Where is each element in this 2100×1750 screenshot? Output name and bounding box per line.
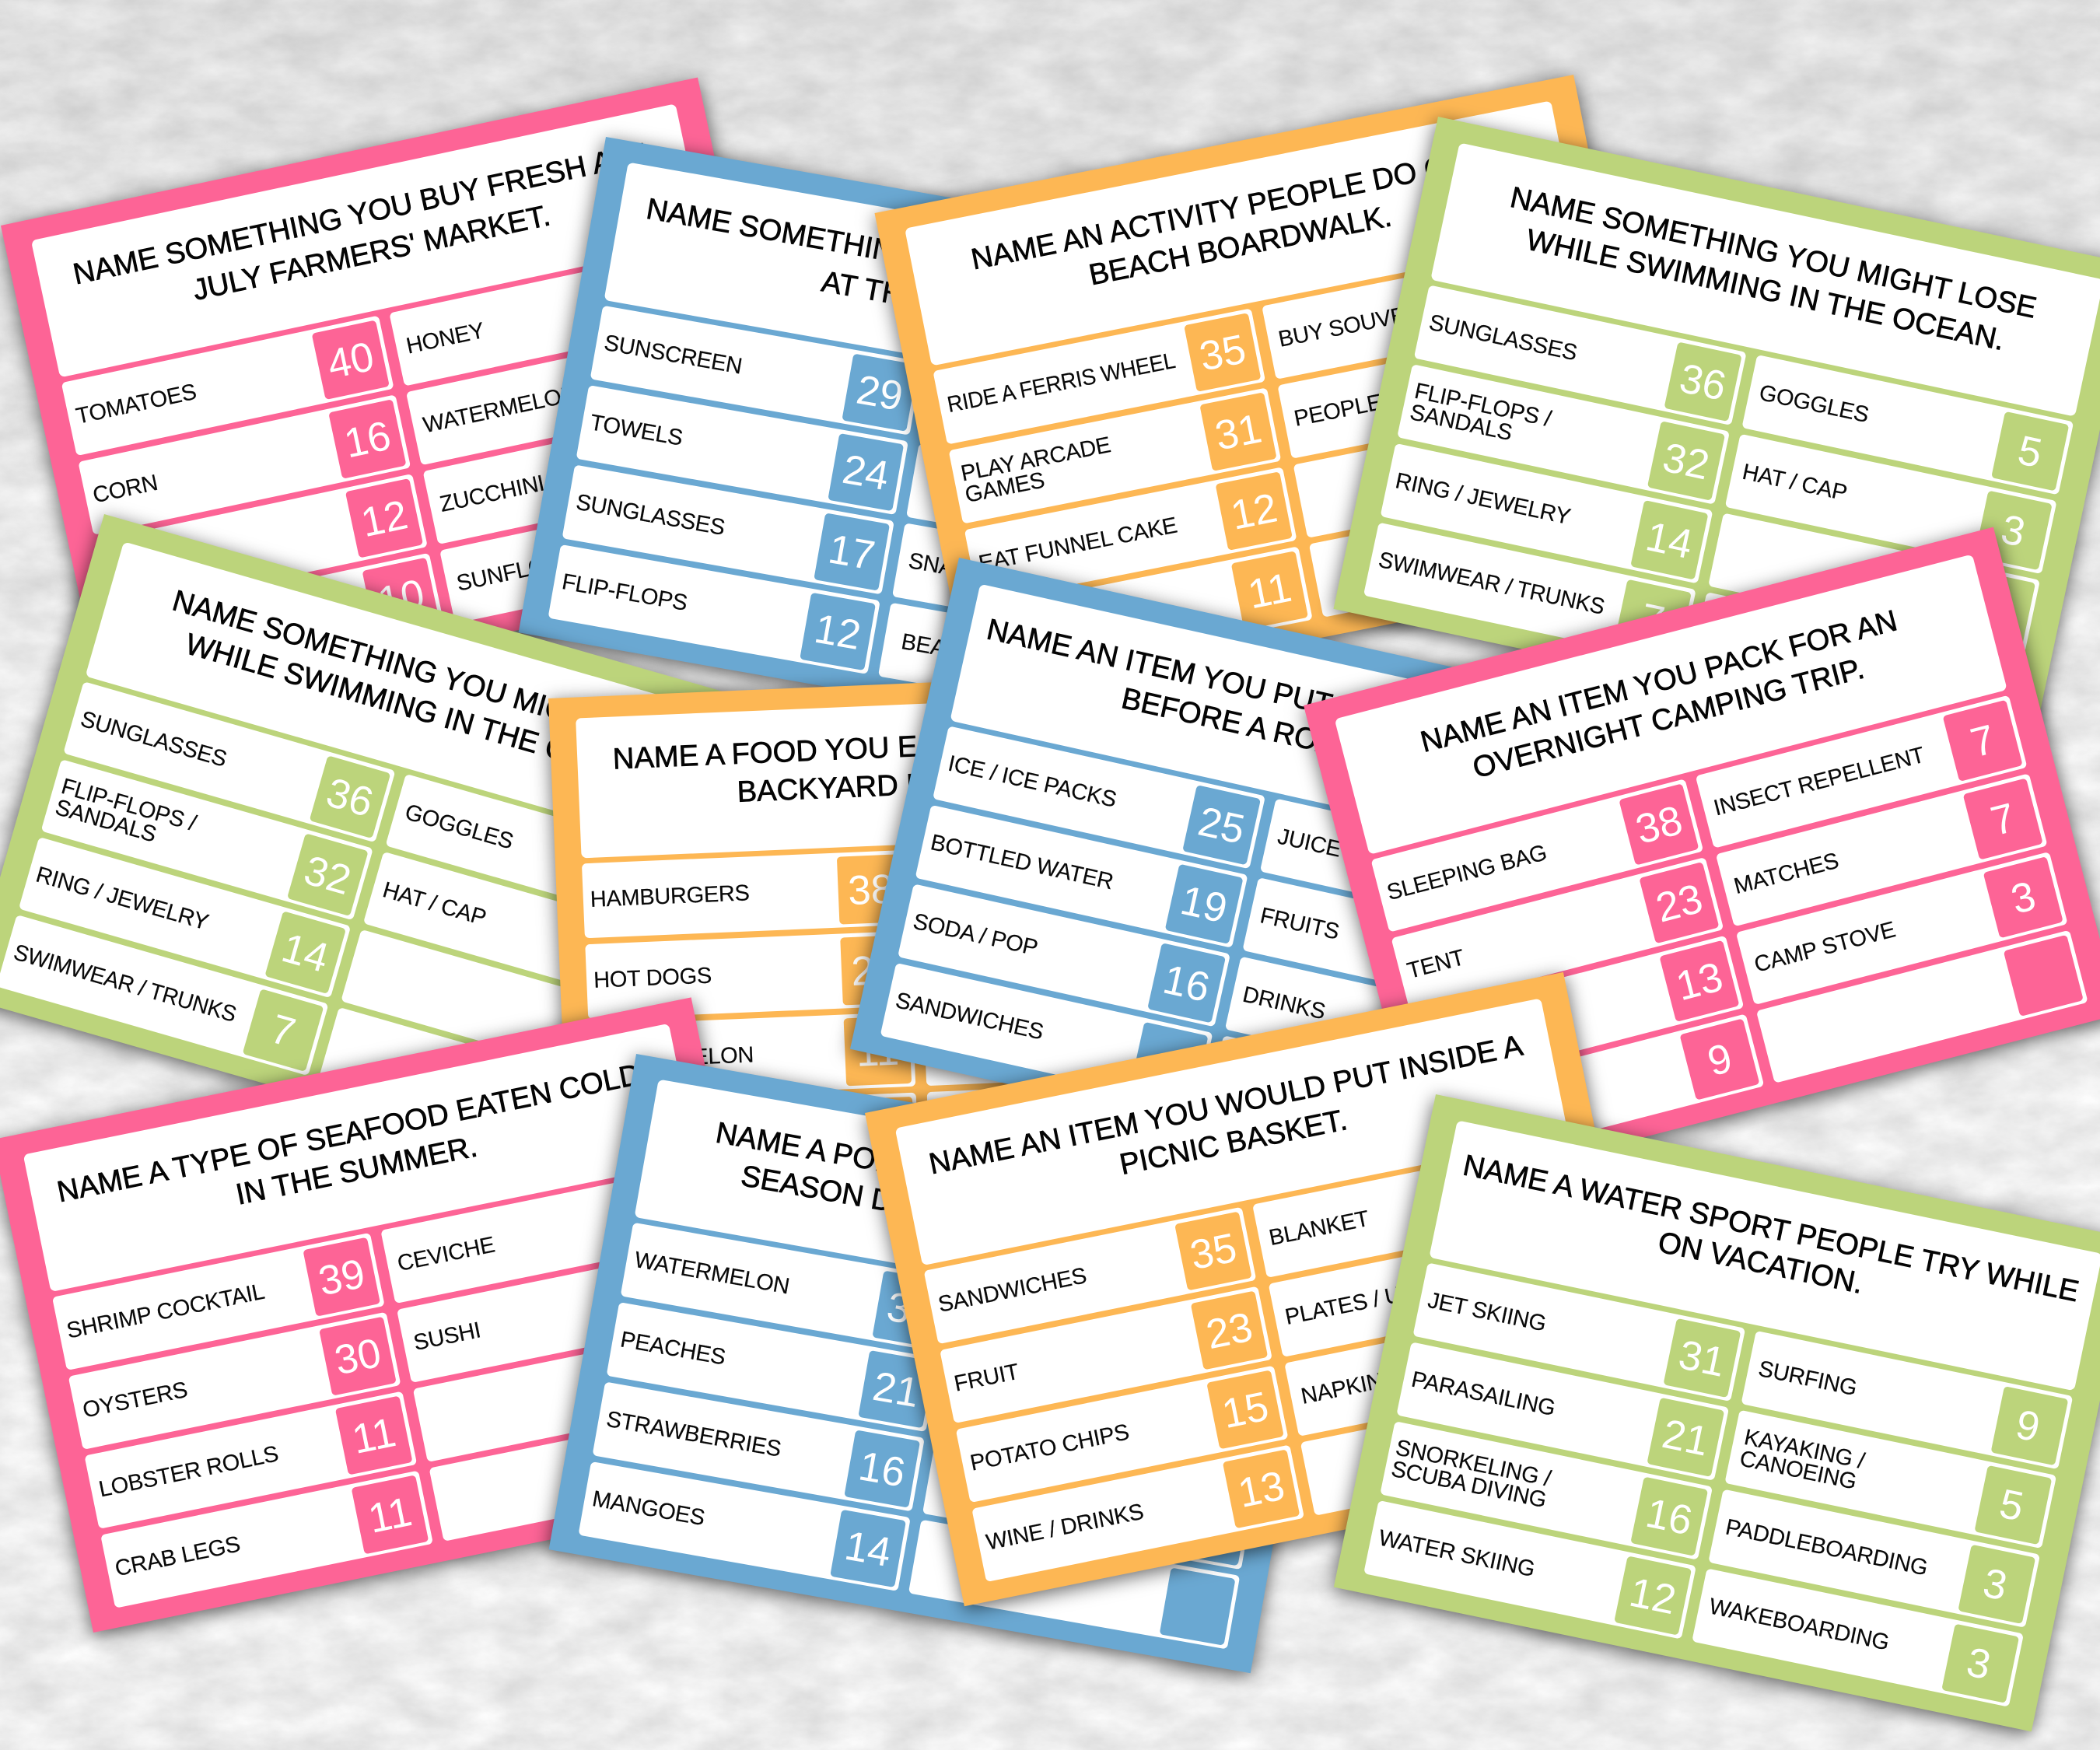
row: hamburgers	[582, 850, 909, 938]
row: watermelon	[406, 325, 738, 465]
panel: green card, water sports	[1334, 1094, 2100, 1731]
row: juice: JUICE	[1276, 824, 1343, 863]
row: parasailing	[1396, 1342, 1729, 1481]
row: 9	[1432, 1013, 1764, 1167]
row: drinks	[1225, 957, 1557, 1099]
row: matches: 7	[1986, 795, 2020, 845]
row: tent	[1391, 857, 1724, 1010]
row: hat: HAT / CAP	[1740, 460, 1849, 506]
row: shrimp cocktail	[52, 1233, 385, 1370]
row: sleeping bag: SLEEPING BAG	[1384, 840, 1549, 905]
row: snorkeling: 16	[1642, 1490, 1696, 1544]
heading: WHILE SWIMMING IN THE OCEAN.	[1524, 223, 2007, 357]
row: sushi: SUSHI	[411, 1318, 483, 1356]
row: sandwiches	[924, 1207, 1256, 1344]
row: hat	[1725, 434, 2057, 574]
heading: PICNIC BASKET.	[1117, 1103, 1350, 1181]
row: arcade games	[949, 387, 1281, 524]
row: 11	[980, 546, 1313, 683]
row: flip-flops: FLIP-FLOPS /	[58, 774, 200, 836]
heading: SEASON DURING SUMMER.	[738, 1159, 1136, 1261]
row: souvenirs	[1262, 243, 1594, 380]
row: watermelon	[589, 1012, 915, 1100]
row: bottled water: 19	[1177, 877, 1231, 932]
row: bottled water	[915, 805, 1248, 948]
heading: WHILE SWIMMING IN THE OCEAN.	[182, 627, 660, 794]
row: souvenirs: BUY SOUVENIRS	[1276, 292, 1460, 352]
row: arcade games: PLAY ARCADE	[959, 432, 1113, 486]
row: jewelry: 14	[277, 925, 334, 982]
row: ceviche: CEVICHE	[395, 1232, 497, 1276]
row: potato chips: 15	[1218, 1384, 1272, 1437]
panel: orange card, picnic	[865, 972, 1663, 1606]
row: wakeboarding	[1692, 1568, 2024, 1707]
row: parasailing: PARASAILING	[1409, 1367, 1557, 1421]
row: right 2	[920, 917, 1247, 1005]
row: right 4	[429, 1404, 761, 1542]
heading: BEFORE A ROAD TRIP.	[1118, 681, 1439, 783]
row: jewelry	[1381, 443, 1713, 583]
row: right 4	[319, 1007, 650, 1168]
row: kayaking: 5	[1996, 1481, 2028, 1530]
row: right 3	[341, 929, 673, 1090]
heading	[604, 162, 1277, 415]
heading: BEACH BOARDWALK.	[1086, 199, 1395, 292]
row: beach ball: BEACH BALL	[899, 629, 1038, 677]
row: swimwear: SWIMWEAR / TRUNKS	[1377, 548, 1607, 620]
heading: NAME AN ACTIVITY PEOPLE DO ON A	[968, 140, 1498, 277]
row: shrimp cocktail: 39	[315, 1251, 369, 1304]
panel: green card, ocean (top right)	[1333, 117, 2100, 757]
row: insect repellent: INSECT REPELLENT	[1711, 743, 1927, 821]
row: watermelon: WATERMELON	[597, 1042, 754, 1074]
row: honey	[389, 246, 721, 387]
row: sushi	[397, 1245, 729, 1383]
panel: blue card, summer fruit	[549, 1054, 1338, 1673]
row: parasailing: 21	[1658, 1411, 1713, 1465]
row: ice: 25	[1194, 799, 1249, 853]
row: mangoes	[578, 1461, 911, 1591]
row: right 4	[1207, 1035, 1539, 1178]
row: peaches	[607, 1302, 939, 1432]
row: sunglasses: SUNGLASSES	[574, 490, 726, 541]
row: right 3	[922, 1440, 1254, 1570]
panel: orange card, backyard food	[548, 669, 1281, 1201]
row: blanket	[1252, 1141, 1584, 1278]
heading: JULY FARMERS' MARKET.	[190, 198, 553, 307]
row: matches: MATCHES	[1731, 849, 1841, 899]
row: watermelon: 11	[856, 1028, 900, 1076]
row: crab legs: 11	[365, 1489, 415, 1542]
row: swimwear: 7	[1636, 595, 1668, 645]
row: ferris wheel: 35	[1195, 326, 1250, 380]
row: people watch: PEOPLE WATCH	[1292, 373, 1468, 432]
row: mangoes: 14	[842, 1523, 894, 1576]
row: sunglasses: 36	[321, 769, 378, 826]
row: flip-flops: 12	[811, 606, 864, 659]
row: goggles	[1741, 355, 2074, 495]
row: plates: PLATES / UTENSILS	[1283, 1264, 1494, 1330]
row: watermelon: WATERMELON	[421, 381, 579, 438]
row: potato chips: POTATO CHIPS	[968, 1419, 1131, 1476]
row: hat	[363, 852, 695, 1013]
row: towels	[576, 385, 908, 515]
row: fruit	[940, 1286, 1272, 1423]
row: zucchini	[423, 404, 754, 544]
row: funnel cake: EAT FUNNEL CAKE	[977, 513, 1179, 576]
heading	[1430, 142, 2100, 417]
row: jewelry: 14	[1642, 513, 1696, 568]
panel: pink card, camping	[1304, 527, 2100, 1192]
row: sandwiches: SANDWICHES	[893, 988, 1045, 1045]
row: tent: TENT	[1405, 945, 1468, 984]
row: paddleboarding: PADDLEBOARDING	[1724, 1515, 1930, 1580]
row: hot dogs: HOT DOGS	[593, 964, 712, 993]
row: sunscreen: SUNSCREEN	[602, 331, 744, 380]
row: ferris wheel	[933, 308, 1265, 444]
row: peaches: PEACHES	[618, 1327, 727, 1370]
row: snacks: SNACKS	[907, 548, 1001, 589]
row: sunglasses: 17	[825, 526, 878, 579]
row: camp stove: 3	[2007, 873, 2040, 923]
row: water skiing: 12	[1626, 1570, 1680, 1623]
row: surfing: SURFING	[1756, 1356, 1859, 1401]
row: tomatoes	[61, 316, 394, 456]
row: peaches: 21	[870, 1363, 922, 1416]
row: sunflowers	[439, 483, 772, 624]
row: right 4	[1692, 592, 2023, 733]
row: strawberries: 16	[856, 1443, 908, 1496]
row: 11: 11	[1244, 565, 1295, 618]
row: snorkeling: SCUBA DIVING	[1389, 1457, 1549, 1513]
heading	[905, 100, 1578, 366]
row: sunglasses: 36	[1675, 355, 1730, 410]
heading: NAME AN ITEM YOU PUT IN A COOLER	[984, 613, 1527, 764]
heading: NAME A POPULAR FRUIT IN	[713, 1116, 1107, 1217]
heading	[31, 103, 705, 377]
row: left 4	[592, 1093, 919, 1181]
row: sunscreen	[590, 306, 922, 436]
row: napkins	[1284, 1300, 1616, 1437]
row: hamburgers: 38	[847, 866, 894, 914]
heading	[1335, 555, 2007, 855]
row: sleeping bag: 38	[1631, 797, 1687, 853]
row: wakeboarding: 3	[1963, 1639, 1994, 1689]
row: wine: WINE / DRINKS	[984, 1500, 1146, 1556]
row: kayaking: CANOEING	[1738, 1446, 1859, 1495]
row: sandwiches: SANDWICHES	[936, 1263, 1089, 1318]
heading: NAME SOMETHING YOU BUY FRESH AT A	[70, 135, 656, 291]
row: flip-flops	[548, 544, 880, 674]
row: paddleboarding: 3	[1979, 1560, 2011, 1609]
row: sunglasses	[63, 681, 396, 842]
row: soda	[898, 884, 1230, 1027]
row: camp stove: CAMP STOVE	[1752, 917, 1898, 978]
row: 10: 10	[374, 571, 429, 625]
row: right 4	[927, 1079, 1253, 1167]
row: oysters: OYSTERS	[81, 1377, 190, 1423]
row: people watch	[1277, 323, 1609, 459]
row: napkins: NAPKINS	[1299, 1366, 1399, 1409]
row: crab legs	[100, 1471, 433, 1608]
row: snorkeling: SNORKELING /	[1394, 1435, 1554, 1492]
row: hot dogs	[585, 931, 912, 1019]
row: goggles: GOGGLES	[402, 800, 516, 854]
row: jet skiing: JET SKIING	[1426, 1288, 1549, 1336]
row: mangoes: MANGOES	[590, 1486, 707, 1531]
heading: NAME SOMETHING YOU MIGHT LOSE	[1507, 180, 2039, 325]
row: matches	[1716, 773, 2048, 926]
row: towels: TOWELS	[588, 410, 684, 451]
panel: orange card, boardwalk	[874, 75, 1671, 707]
row: sandwiches	[880, 963, 1213, 1106]
heading	[576, 691, 1240, 858]
row: surfing	[1741, 1331, 2073, 1469]
row: tomatoes: 40	[324, 334, 378, 388]
row: swimwear: SWIMWEAR / TRUNKS	[11, 940, 239, 1027]
row: jet skiing	[1412, 1262, 1745, 1402]
row: 13: 13	[1671, 954, 1727, 1010]
row: bottled water: BOTTLED WATER	[928, 830, 1115, 894]
row: water skiing: WATER SKIING	[1377, 1525, 1537, 1582]
row: fruits	[1242, 877, 1574, 1020]
row: lobster rolls: LOBSTER ROLLS	[96, 1441, 281, 1502]
row: plates	[1269, 1220, 1600, 1357]
heading: NAME A TYPE OF SEAFOOD EATEN COLD	[54, 1058, 644, 1209]
heading: OVERNIGHT CAMPING TRIP.	[1469, 652, 1867, 785]
row: potato chips	[956, 1366, 1288, 1503]
row: lobster rolls: 11	[348, 1409, 400, 1463]
row: kayaking: KAYAKING /	[1742, 1425, 1867, 1474]
row: sleeping bag	[1370, 779, 1703, 933]
row: sunglasses	[1414, 285, 1747, 425]
row: corn: CORN	[91, 471, 160, 509]
heading	[635, 1079, 1307, 1332]
heading: NAME SOMETHING YOU BRING	[644, 192, 1091, 303]
panel: blue card, beach	[519, 137, 1307, 756]
row: oysters	[68, 1312, 401, 1450]
row: 9: 9	[1703, 1035, 1737, 1085]
row: wine: 13	[1234, 1463, 1289, 1517]
row: insect repellent	[1696, 695, 2028, 849]
row: strawberries	[593, 1381, 925, 1511]
row: wakeboarding: WAKEBOARDING	[1707, 1594, 1892, 1655]
row: funnel cake	[964, 467, 1297, 604]
row: ferris wheel: RIDE A FERRIS WHEEL	[945, 348, 1178, 418]
row: jewelry: RING / JEWELRY	[1393, 468, 1573, 530]
row: sunflowers: SUNFLOWERS	[454, 540, 613, 597]
row: right 3	[923, 998, 1250, 1086]
row: wine	[971, 1444, 1304, 1582]
row: watermelon	[621, 1223, 953, 1353]
row: lobster rolls	[84, 1391, 417, 1529]
row: swimwear: 7	[265, 1006, 300, 1056]
row: soda: 16	[1159, 957, 1214, 1011]
row: oysters: 30	[331, 1330, 385, 1384]
row: jewelry: RING / JEWELRY	[33, 863, 211, 935]
row: goggles: GOGGLES	[1757, 380, 1871, 428]
panel: blue card, road trip	[850, 558, 1654, 1203]
row: sunglasses: SUNGLASSES	[78, 707, 229, 772]
row: corn	[78, 394, 411, 535]
row: drinks: DRINKS	[1241, 982, 1328, 1024]
row: ceviche	[380, 1166, 712, 1304]
row: hamburgers: HAMBURGERS	[590, 880, 750, 912]
heading: AT THE BEACH.	[819, 264, 1043, 336]
row: surfing: 9	[2012, 1402, 2044, 1451]
row: 12	[95, 474, 428, 614]
row: soda: SODA / POP	[911, 909, 1040, 961]
row: watermelon: WATERMELON	[632, 1248, 791, 1299]
row: swimwear	[0, 915, 329, 1076]
row: jewelry	[19, 837, 351, 998]
row: sunglasses	[562, 464, 894, 594]
row: honey: HONEY	[404, 318, 487, 359]
row: flip-flops: SANDALS	[52, 795, 159, 848]
row: hot dogs: 24	[850, 947, 898, 995]
row: zucchini: ZUCCHINI	[438, 471, 547, 517]
heading	[1429, 1120, 2100, 1391]
row: ice	[933, 726, 1265, 869]
row: funnel cake: 12	[1227, 485, 1281, 539]
heading	[23, 1024, 697, 1292]
panel: pink card, farmers' market	[1, 78, 803, 718]
heading: NAME SOMETHING YOU MIGHT LOSE	[169, 584, 694, 764]
row: arcade games: 31	[1212, 405, 1265, 460]
row: towels: 24	[839, 446, 892, 499]
row: flip-flops: FLIP-FLOPS /	[1412, 379, 1554, 432]
row: camp stove	[1736, 852, 2068, 1005]
row: flip-flops: FLIP-FLOPS	[560, 569, 689, 616]
row: flip-flops	[1397, 364, 1730, 505]
row: flip-flops: SANDALS	[1408, 400, 1514, 446]
row: fruit: FRUIT	[952, 1360, 1021, 1397]
panel: pink card, seafood	[0, 997, 792, 1633]
heading: NAME AN ITEM YOU PACK FOR AN	[1417, 604, 1901, 759]
row: kayaking	[1724, 1410, 2056, 1549]
row: right 3	[1293, 402, 1625, 538]
row: blanket: BLANKET	[1267, 1206, 1371, 1251]
row: corn: 16	[341, 412, 395, 467]
row: hat: HAT / CAP	[380, 877, 488, 931]
heading: NAME A FOOD YOU EAT AT A	[612, 726, 1022, 776]
row: sandwiches: 35	[1186, 1225, 1241, 1279]
row: strawberries: STRAWBERRIES	[604, 1407, 783, 1462]
row: flip-flops: 32	[1659, 434, 1713, 488]
row: right 1	[950, 1280, 1282, 1410]
row: right 1	[920, 363, 1251, 493]
heading: BACKYARD BBQ.	[737, 765, 978, 809]
row: 12: 12	[357, 492, 411, 546]
heading	[950, 584, 1623, 863]
row: water skiing	[1363, 1500, 1696, 1640]
row: right 4	[908, 1520, 1240, 1650]
row: beach ball	[878, 603, 1209, 733]
row: tomatoes: TOMATOES	[74, 380, 198, 429]
row: ice: ICE / ICE PACKS	[946, 751, 1118, 813]
heading	[895, 998, 1569, 1265]
row: 10	[112, 553, 444, 693]
heading: IN THE SUMMER.	[233, 1130, 480, 1212]
row: swimwear	[1363, 523, 1696, 663]
heading: ON VACATION.	[1655, 1225, 1866, 1300]
row: 13	[1412, 936, 1744, 1089]
row: crab legs: CRAB LEGS	[113, 1531, 243, 1581]
row: shrimp cocktail: SHRIMP COCKTAIL	[65, 1279, 267, 1344]
row: fruit: 23	[1202, 1304, 1256, 1358]
row: right 2	[936, 1360, 1268, 1490]
row: sunglasses: SUNGLASSES	[1426, 310, 1580, 366]
row: goggles	[386, 774, 717, 935]
row: tent: 23	[1651, 876, 1707, 932]
row: insect repellent: 7	[1966, 716, 2000, 767]
row: right 3	[413, 1325, 745, 1462]
row: snorkeling	[1380, 1421, 1713, 1560]
row: goggles: 5	[2014, 427, 2046, 477]
row: snacks	[892, 523, 1223, 653]
row: watermelon: 30	[884, 1283, 936, 1337]
row: flip-flops: 32	[299, 847, 356, 904]
row: hat: 3	[1997, 506, 2029, 556]
panel: green card, ocean (left)	[0, 514, 789, 1194]
heading: NAME AN ITEM YOU WOULD PUT INSIDE A	[926, 1029, 1526, 1181]
row: juice	[1260, 799, 1592, 941]
row: right 2	[906, 443, 1237, 573]
row: fruits: FRUITS	[1258, 903, 1342, 945]
heading	[86, 541, 757, 858]
row: right 4	[1309, 481, 1641, 618]
row: arcade games: GAMES	[963, 467, 1047, 508]
row: jet skiing: 31	[1675, 1332, 1729, 1386]
heading: NAME A WATER SPORT PEOPLE TRY WHILE	[1460, 1149, 2082, 1308]
row: right 3	[1708, 513, 2040, 653]
row: right 1	[917, 836, 1243, 924]
row: flip-flops	[41, 759, 373, 920]
row: right 4	[1300, 1378, 1633, 1516]
row: sunscreen: 29	[853, 366, 906, 420]
row: right 4 empty	[1756, 930, 2088, 1083]
row: paddleboarding	[1708, 1489, 2040, 1628]
